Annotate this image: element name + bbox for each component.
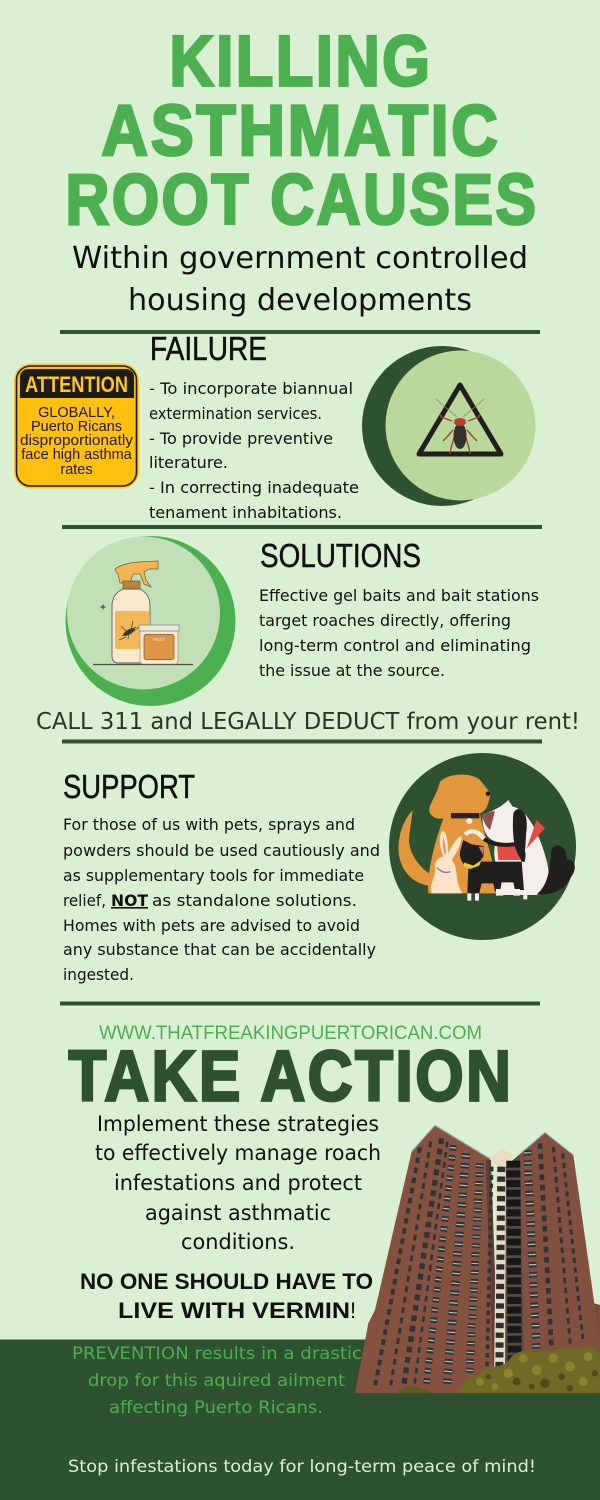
- support text: any substance that can be accidentally: [63, 940, 376, 959]
- callout: attention sign: [14, 364, 139, 488]
- callout: no one should have to live with vermin: !: [350, 1298, 356, 1323]
- take action text: [95, 1112, 381, 1255]
- panel: support: [63, 753, 576, 984]
- take action text: against asthmatic: [145, 1201, 331, 1226]
- support text: powders should be used cautiously and: [63, 841, 380, 860]
- prevention text: drop for this aquired ailment: [88, 1371, 345, 1391]
- heading: take action: TAKE ACTION: [68, 1038, 514, 1116]
- subtitle: housing developments: [128, 283, 472, 318]
- solutions text: long-term control and eliminating: [259, 636, 531, 655]
- failure list: - To incorporate biannual: [149, 379, 353, 398]
- panel: failure: [14, 330, 536, 522]
- prevention text: [72, 1344, 362, 1418]
- take action text: infestations and protect: [114, 1171, 362, 1196]
- title: ASTHMATIC: [102, 92, 500, 171]
- subtitle: Within government controlled: [72, 241, 528, 276]
- title: [66, 22, 538, 240]
- failure list: literature.: [149, 453, 228, 472]
- callout: attention sign: ATTENTION: [25, 372, 128, 397]
- support text: ingested.: [63, 965, 134, 984]
- callout: no one should have to live with vermin: [80, 1269, 373, 1323]
- footer tagline: Stop infestations today for long-term peace of mind!: [68, 1457, 536, 1477]
- call to action: call 311: CALL 311 and LEGALLY DEDUCT from your rent!: [36, 709, 580, 735]
- illustration: public housing tower: [340, 1125, 600, 1395]
- icon: cockroach warning: [362, 346, 536, 506]
- failure list: [149, 379, 359, 522]
- failure list: - To provide preventive: [149, 429, 333, 448]
- solutions text: [259, 586, 539, 680]
- callout: attention sign: disproportionatly: [20, 433, 134, 449]
- support text: For those of us with pets, sprays and: [63, 815, 355, 834]
- failure list: extermination services.: [149, 404, 322, 423]
- prevention text: PREVENTION results in a drastic: [72, 1344, 362, 1364]
- callout: attention sign: Puerto Ricans: [31, 419, 122, 435]
- footer band: [0, 1340, 600, 1500]
- icon: pest spray and bait jar: PEST: [153, 637, 165, 642]
- solutions text: the issue at the source.: [259, 661, 445, 680]
- heading: failure: FAILURE: [150, 330, 267, 367]
- failure list: tenament inhabitations.: [149, 503, 342, 522]
- support text: NOT: [111, 891, 148, 910]
- heading: support: SUPPORT: [63, 768, 195, 805]
- icon: pets group: [389, 753, 576, 940]
- take action text: to effectively manage roach: [95, 1141, 381, 1166]
- icon: pest spray and bait jar: [66, 536, 236, 706]
- failure list: - In correcting inadequate: [149, 478, 359, 497]
- panel: solutions: [66, 536, 539, 706]
- support text: relief,: [63, 891, 106, 910]
- support text: Homes with pets are advised to avoid: [63, 916, 360, 935]
- support text: [63, 815, 380, 984]
- solutions text: Effective gel baits and bait stations: [259, 586, 539, 605]
- title: KILLING: [170, 22, 432, 102]
- support text: as standalone solutions.: [152, 891, 357, 910]
- callout: no one should have to live with vermin: NO ONE SHOULD HAVE TO: [80, 1269, 373, 1294]
- support text: as supplementary tools for immediate: [63, 866, 364, 885]
- callout: attention sign: rates: [60, 462, 93, 478]
- callout: attention sign: face high asthma: [21, 447, 133, 463]
- prevention text: affecting Puerto Ricans.: [109, 1398, 323, 1418]
- callout: no one should have to live with vermin: LIVE WITH VERMIN: [118, 1298, 350, 1323]
- take action text: conditions.: [181, 1230, 295, 1255]
- website url: WWW.THATFREAKINGPUERTORICAN.COM: [99, 1023, 482, 1044]
- take action text: Implement these strategies: [97, 1112, 379, 1137]
- solutions text: target roaches directly, offering: [259, 611, 511, 630]
- heading: solutions: SOLUTIONS: [260, 537, 421, 574]
- subtitle: [72, 241, 528, 318]
- callout: attention sign: GLOBALLY,: [38, 405, 115, 421]
